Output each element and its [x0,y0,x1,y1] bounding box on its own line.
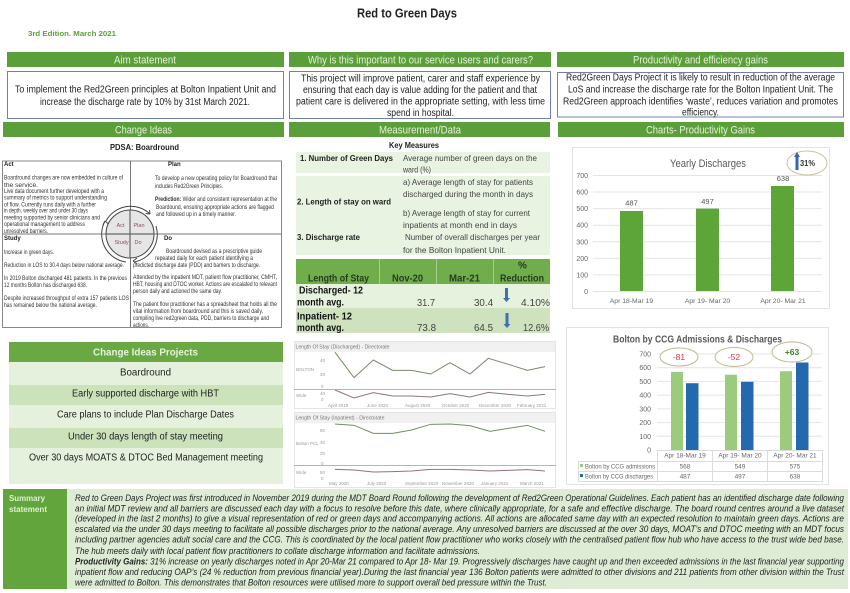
text: Act quadrant: meeting supported by senior clinicians and [4,215,100,221]
table: length of stay: Reduction [500,274,544,284]
callout: 31 percent increase: 31% [800,159,815,168]
data table: 549 [735,464,746,470]
chart: length of stay discharged: June 2020 [367,403,389,408]
summary text [75,493,845,588]
text: Do quadrant: vital information from boardround and this is saved daily, [133,309,263,315]
panel: why is this important: ensuring that each day is value adding for the patient and that [303,85,537,96]
panel: change ideas projects: Over 30 days MOATS & DTOC Bed Management meeting [29,452,263,464]
summary label: Summary [9,494,46,503]
chart: yearly discharges: 100 [576,272,588,279]
table: length of stay: 4.10% [521,298,550,309]
panel: key measures: 1. Number of Green Days [300,153,393,163]
callout: minus 81 [660,348,698,366]
table: length of stay: Length of Stay [308,274,369,284]
data table: Bolton by CCG discharges [585,474,654,480]
chart: length of stay inpatient: 0 [321,476,324,481]
panel: key measures: for the Bolton Inpatient Unit. [403,245,506,255]
panel: why is this important: patient care is delivered in the appropriate setting, with less time [296,96,545,108]
text: Act quadrant: Boardround changes are now embedded in culture of [4,176,123,182]
chart: length of stay discharged: 0 [321,384,324,389]
panel: key measures [296,141,550,255]
chart: length of stay inpatient [294,412,556,488]
chart: admissions and discharges: 200 [639,420,651,427]
text: Plan quadrant: Prediction: Wider and consistent representation at the [155,197,278,203]
chart: length of stay inpatient: January 2021 [481,481,509,486]
panel: aim statement: Aim statement [114,54,176,66]
text: Do quadrant: Do [164,236,172,242]
heading: measurement and data: Measurement/Data [379,124,462,136]
callout: minus 81: -81 [673,352,685,362]
data table: Apr 20- Mar 21 [773,452,817,460]
summary label: statement [9,505,47,514]
table: length of stay: Discharged- 12 [299,286,363,296]
text: Act quadrant: operational management to address [4,222,85,228]
text: Do quadrant: HBT, housing and DTOC worker. Actions are escalated to relevant [133,282,277,288]
chart: admissions and discharges: 700 [639,352,651,358]
chart: length of stay discharged: August 2020 [405,403,431,408]
callout: 31 percent increase [787,151,827,175]
panel: change ideas projects: Change Ideas Projects [93,346,198,358]
chart: yearly discharges: 200 [576,256,588,263]
summary text: The hub meets daily with local patient flow practitioners to collate discharge information and facilitate admissions. [75,546,480,557]
table: length of stay: 30.4 [474,298,493,309]
data table: 568 [680,464,691,470]
text: Act quadrant: summary of metrics to support understanding [4,196,107,202]
panel: aim statement: increase the discharge rate by 10% by 31st March 2021. [40,97,250,108]
panel: key measures: b) Average length of stay for current [403,208,531,218]
text: Do quadrant: Attended by the inpatient MDT, patient flow practitioner, CMHT, [133,275,277,281]
panel: productivity and efficiency gains: efficiency. [682,108,719,118]
data table: 638 [790,474,801,480]
chart: yearly discharges: Apr 20- Mar 21 [760,298,806,305]
chart: admissions and discharges: 100 [639,434,651,441]
panel: key measures: inpatients at month end in days [403,220,517,230]
panel: key measures: 3. Discharge rate [297,232,360,242]
text: Plan quadrant [155,162,278,218]
panel: key measures: Average number of green days on the [403,153,537,163]
data table: 575 [790,464,801,470]
icon: down arrow discharged [503,288,510,302]
text: Plan quadrant: Plan [168,162,181,168]
icon: PDSA cycle: Study [114,240,129,246]
text: Plan quadrant: To develop a new operating policy for Boardround that [155,176,277,182]
heading: measurement and data [289,122,550,137]
text: Plan quadrant: includes Red2Green Principles. [155,184,223,190]
text: Act quadrant: the service. [4,183,38,189]
panel: change ideas projects: Under 30 days length of stay meeting [68,432,223,442]
text: Act quadrant: in depth, weekly over and under 30 days [4,209,88,215]
text: Study quadrant: Increase in green days. [4,250,54,256]
panel: productivity and efficiency gains: Productivity and efficiency gains [633,54,768,66]
panel: change ideas projects: Early supported discharge with HBT [72,388,219,400]
chart: length of stay discharged [294,342,556,408]
chart: length of stay inpatient: 80 [320,428,326,433]
chart: length of stay inpatient: Wide [296,470,307,475]
table: length of stay [296,259,550,334]
summary text: were admitted to Bolton. This demonstrates that Bolton resources were utilised more to support overall bed pressure within the Trust. [75,578,547,588]
chart: length of stay inpatient: July 2020 [367,481,387,486]
text: Act quadrant: Live data document further developed with a [4,189,105,195]
chart: length of stay inpatient: March 2021 [520,481,544,486]
chart: length of stay inpatient: 50 [320,470,326,475]
icon: PDSA cycle: Do [134,240,142,246]
chart: length of stay discharged: 0 [321,397,324,402]
heading: change ideas: Change Ideas [115,124,172,136]
edition label: 3rd Edition. March 2021 [28,29,116,38]
chart: admissions and discharges [566,328,828,484]
panel: why is this important: This project will improve patient, carer and staff experience by [301,74,540,84]
chart: length of stay discharged: 40 [320,358,326,363]
text: Act quadrant [4,162,123,235]
chart: length of stay discharged: October 2020 [442,403,470,408]
chart: length of stay inpatient: Length Of Stay (Inpatient) - Directorate [296,416,384,422]
heading: charts productivity gains: Charts- Productivity Gains [646,124,755,136]
panel: change ideas projects: Boardround [120,368,171,378]
chart: yearly discharges: Apr 18-Mar 19 [610,298,653,305]
chart: yearly discharges: 638 [777,174,789,183]
text: Study quadrant: Despite increased throughput of extra 157 patients LOS [4,296,129,302]
table: length of stay: 12.6% [523,323,549,334]
table: length of stay: Mar-21 [449,274,480,284]
chart: length of stay discharged: Length Of Stay (Discharged) - Directorate [296,344,390,350]
icon: down arrow inpatient [504,313,510,328]
data table: Bolton by CCG admissions [585,464,656,470]
text: Act quadrant: Act [4,162,14,168]
panel: key measures: discharged during the month in days [403,189,533,199]
callout: plus 63 [772,342,812,362]
chart: yearly discharges: 600 [576,190,588,196]
chart: yearly discharges [572,148,830,308]
chart: yearly discharges: 700 [576,173,588,180]
callout: minus 52 [715,348,753,366]
table: length of stay: month avg. [297,323,344,334]
table: length of stay: Inpatient- 12 [297,312,352,322]
text: Act quadrant: unresolved barriers. [4,229,48,235]
heading: charts productivity gains [558,122,844,137]
title: Red to Green Days [357,6,457,20]
table: length of stay: 31.7 [417,298,435,309]
chart: yearly discharges: 0 [584,289,588,296]
chart: length of stay discharged: Wide [296,393,307,398]
chart: admissions and discharges: 0 [647,448,651,454]
text: Study quadrant: Reduction in LOS to 30.4 days below national average. [4,263,124,269]
text: Do quadrant: Boardround devised as a prescriptive guide [166,249,263,255]
chart: yearly discharges: 300 [576,239,588,246]
chart: length of stay inpatient: May 2020 [329,481,349,486]
text: Do quadrant: person daily and actioned the same day. [133,289,222,295]
icon: PDSA cycle: Act [116,223,125,229]
chart: yearly discharges: Apr 19- Mar 20 [685,298,730,305]
text: Do quadrant [133,236,278,329]
chart: length of stay discharged: 40 [320,391,326,396]
text: Do quadrant: actions. [133,323,149,329]
chart: length of stay discharged: February 2021 [517,403,547,408]
heading: change ideas [3,122,284,137]
panel: summary statement [3,489,848,589]
summary label [3,489,67,589]
chart: admissions and discharges: Bolton by CCG Admissions & Discharges [613,334,782,346]
panel: PDSA grid [2,161,282,329]
text: Do quadrant: compiling live red2green data, PDD, barriers to discharge and [133,316,269,322]
chart: length of stay inpatient: November 2020 [442,481,475,486]
chart: admissions and discharges: 500 [639,379,651,386]
panel: key measures: a) Average length of stay for patients [403,177,533,187]
table: length of stay: 64.5 [474,323,493,334]
panel: why is this important: spend in hospital. [387,108,454,119]
panel: key measures: ward (%) [402,164,431,174]
chart: length of stay discharged: BOLTON [296,367,314,372]
chart: admissions and discharges: 300 [639,406,651,413]
text: Do quadrant: predicted discharge date (PDD) and barriers to discharge. [133,263,260,269]
callout: minus 52: -52 [728,352,740,362]
panel: key measures: 2. Length of stay on ward [297,196,391,206]
text: Study quadrant: has remained below the national average. [4,303,97,309]
chart: length of stay inpatient: 20 [320,451,326,456]
data table: 497 [735,474,746,480]
table: length of stay: 73.8 [417,323,436,334]
data table: 487 [680,474,691,480]
text: Study quadrant [4,236,129,309]
chart: admissions and discharges: 400 [639,393,651,400]
panel: key measures: Number of overall discharges per year [405,232,540,242]
text: Act quadrant: of flow. Currently runs daily with a further [4,202,96,208]
panel: key measures: Key Measures [389,141,440,150]
panel: aim statement [7,52,284,118]
panel: why is this important: Why is this important to our service users and carers? [308,54,533,66]
chart: yearly discharges: 487 [625,198,638,208]
panel: change ideas projects [9,342,283,484]
chart: length of stay inpatient: 40 [320,440,326,445]
chart: yearly discharges: Yearly Discharges [670,158,746,170]
text: Study quadrant: 12 months Bolton has discharged 638. [4,283,87,289]
data table [578,450,822,482]
text: Plan quadrant: and followed up in a timely manner. [156,212,236,218]
text: Do quadrant: repeated daily for each patient identifying a [155,256,254,262]
chart: admissions and discharges: 600 [639,365,651,372]
data table: Apr 18-Mar 19 [664,452,706,460]
text: Do quadrant: The patient flow practitioner has a spreadsheet that holds all the [133,302,278,308]
text: Study quadrant: In 2019 Bolton discharged 481 patients. In the previous [4,276,127,282]
chart: length of stay discharged: 20 [320,372,326,377]
chart: length of stay discharged: April 2019 [328,403,349,408]
panel: aim statement: To implement the Red2Green principles at Bolton Inpatient Unit and [15,84,276,96]
PDSA heading: PDSA: Boardround [110,142,179,152]
icon: PDSA cycle: Plan [134,223,145,229]
data table: Apr 19- Mar 20 [718,452,762,460]
chart: length of stay inpatient: Bolton PCL [296,441,319,446]
callout: plus 63: +63 [785,347,799,357]
chart: length of stay inpatient: September 2020 [405,481,439,486]
chart: length of stay inpatient: 0 [321,461,324,466]
chart: yearly discharges: 400 [576,223,588,230]
table: length of stay: Nov-20 [392,274,423,284]
table: length of stay: % [518,260,527,272]
panel: change ideas projects: Care plans to include Plan Discharge Dates [57,410,234,420]
table: length of stay: month avg. [297,298,344,308]
panel: productivity and efficiency gains [557,52,844,118]
panel: why is this important [289,52,551,119]
text: Study quadrant: Study [4,236,21,242]
chart: length of stay discharged: December 2020 [479,403,512,408]
chart: yearly discharges: 500 [576,206,588,213]
icon: PDSA cycle [102,206,157,264]
chart: yearly discharges: 497 [701,197,714,206]
text: Plan quadrant: Boardound, ensuring appropriate actions are flagged [156,205,274,211]
